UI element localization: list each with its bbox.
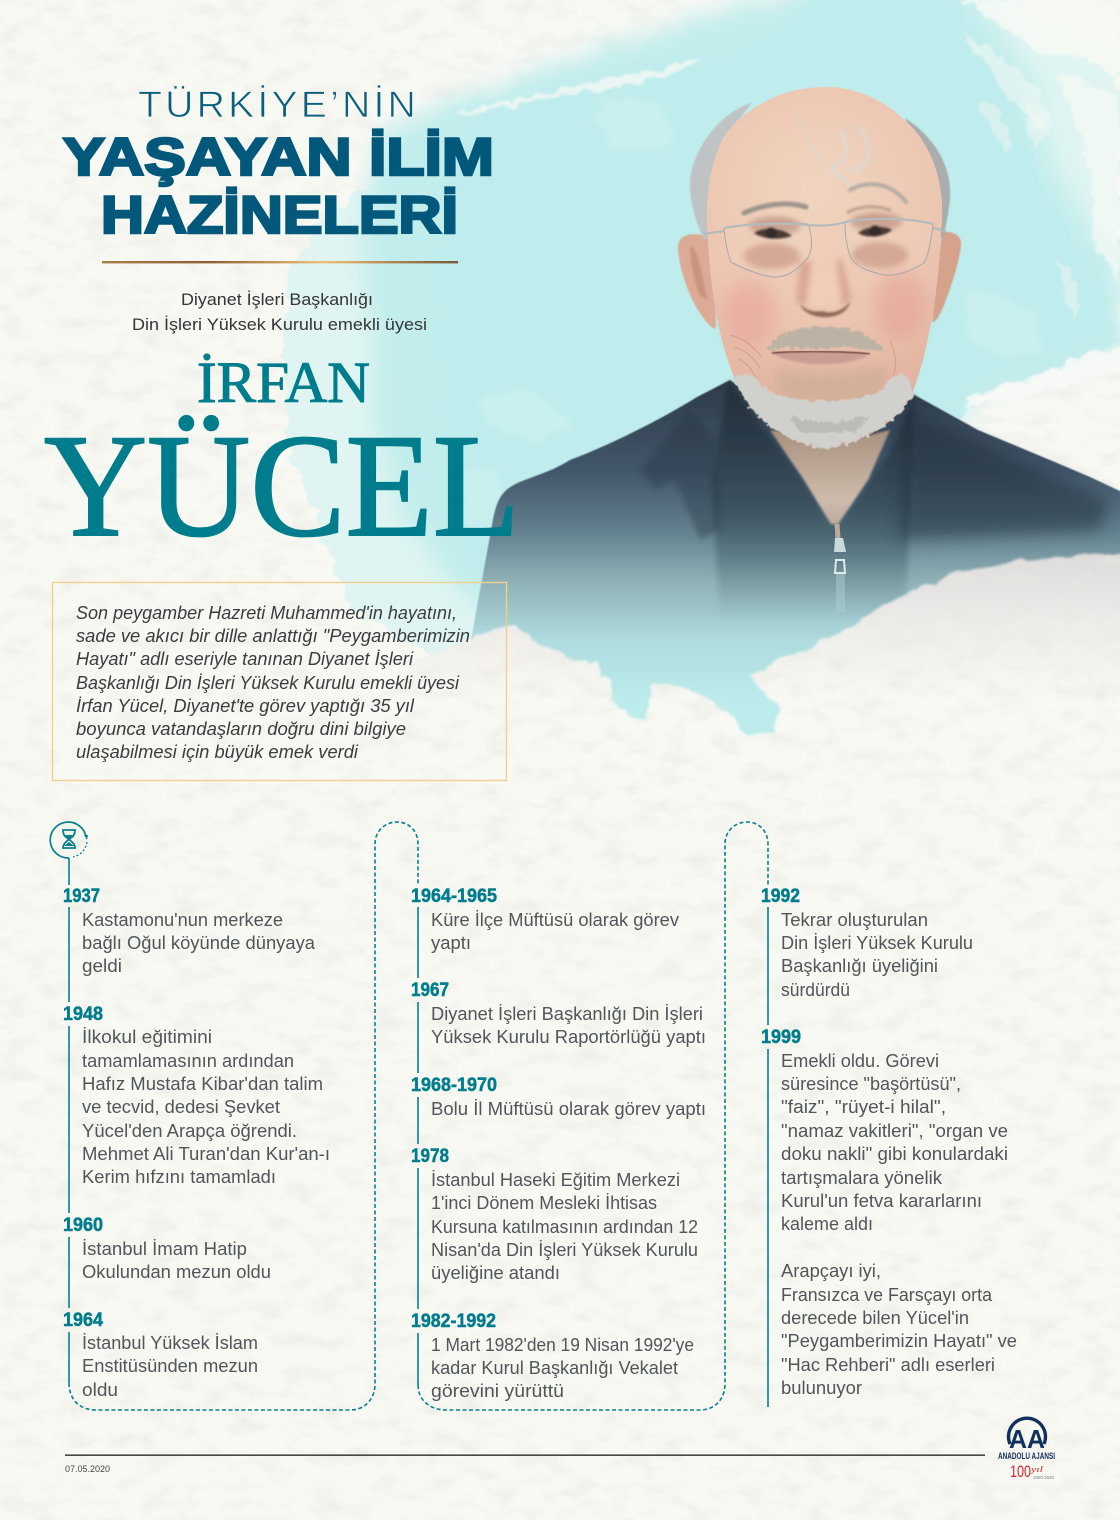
chin patch xyxy=(775,364,888,406)
timeline connector lines xyxy=(69,822,768,1410)
title: Hazineleri: HAZİNELERİ xyxy=(101,186,458,245)
gold divider xyxy=(102,261,458,263)
entry: 1967: Diyanet İşleri Başkanlığı Din İşleri xyxy=(431,1004,703,1024)
entry: 1948: Kerim hıfzını tamamladı xyxy=(82,1167,276,1187)
title: Türkiye'nin: TÜRKİYE’NİN xyxy=(138,84,419,125)
logo: Anadolu Ajansı: AA xyxy=(1009,1424,1045,1454)
subtitle: Din İşleri Yüksek Kurulu emekli üyesi xyxy=(132,315,427,334)
entry: 1999: süresince "başörtüsü", xyxy=(781,1074,961,1094)
entry: 1978: 1'inci Dönem Mesleki İhtisas xyxy=(431,1193,657,1213)
entry: 1982-1992: kadar Kurul Başkanlığı Vekalet xyxy=(431,1358,678,1378)
white brush streaks, upper edge and upper right xyxy=(450,0,1120,408)
title: Yaşayan İlim: YAŞAYAN İLİM xyxy=(63,128,494,187)
glasses xyxy=(704,219,946,277)
intro text box: İrfan Yücel, Diyanet'te görev yaptığı 35 yıl xyxy=(76,696,415,716)
entry: 1948 xyxy=(63,1004,330,1187)
entry: 1967 xyxy=(411,980,706,1047)
inner shirt and lapels xyxy=(712,382,915,620)
intro text box: Hayatı" adlı eseriyle tanınan Diyanet İşleri xyxy=(76,649,414,669)
eye sockets and bags xyxy=(744,243,800,269)
logo: Anadolu Ajansı xyxy=(998,1418,1055,1481)
entry: 1978: Kursuna katılmasının ardından 12 xyxy=(431,1217,698,1237)
entry: 1960: Okulundan mezun oldu xyxy=(82,1262,271,1282)
intro text box: Son peygamber Hazreti Muhammed'in hayatını, xyxy=(76,603,457,623)
subtitle xyxy=(132,290,427,334)
closing paragraph: derecede bilen Yücel'in xyxy=(781,1308,969,1328)
name: Yücel: YÜCEL xyxy=(44,404,520,567)
entry: 1992: Tekrar oluşturulan xyxy=(781,910,928,930)
entry: 1937: bağlı Oğul köyünde dünyaya xyxy=(82,933,316,953)
mouth xyxy=(772,351,870,364)
entry: 1964-1965: yaptı xyxy=(431,933,471,953)
right ear xyxy=(932,232,961,322)
closing paragraph: "Hac Rehberi" adlı eserleri xyxy=(781,1355,995,1375)
entry: 1964 xyxy=(63,1310,258,1400)
logo: Anadolu Ajansı: ANADOLU AJANSI xyxy=(998,1451,1055,1462)
entry: 1937: geldi xyxy=(82,956,122,976)
portrait of İrfan Yücel xyxy=(468,87,1120,740)
entry: 1964-1965 xyxy=(411,886,679,953)
logo: Anadolu Ajansı: 1920-2020 xyxy=(1033,1475,1054,1480)
entry: 1999 xyxy=(761,1027,1008,1234)
intro text box: boyunca vatandaşların doğru dini bilgiye xyxy=(76,719,406,739)
logo: Anadolu Ajansı: 100 xyxy=(1010,1462,1031,1481)
entry: 1964: oldu xyxy=(82,1380,118,1400)
moustache xyxy=(768,326,884,352)
entry: 1978: 1978 xyxy=(411,1146,449,1167)
entry: 1964: Enstitüsünden mezun xyxy=(82,1356,258,1376)
closing paragraph: bulunuyor xyxy=(781,1378,862,1398)
beard xyxy=(733,374,914,448)
entry: 1978: İstanbul Haseki Eğitim Merkezi xyxy=(431,1170,680,1190)
entry: 1948: İlkokul eğitimini xyxy=(82,1027,212,1047)
name: İrfan: İRFAN xyxy=(197,350,370,415)
timeline column 3 xyxy=(761,886,1017,1398)
closing paragraph: "Peygamberimizin Hayatı" ve xyxy=(781,1331,1017,1351)
entry: 1948: 1948 xyxy=(63,1004,103,1025)
entry: 1948: Hafız Mustafa Kibar'dan talim xyxy=(82,1074,323,1094)
closing paragraph: Fransızca ve Farsçayı orta xyxy=(781,1285,993,1305)
entry: 1982-1992: 1 Mart 1982'den 19 Nisan 1992'ye xyxy=(431,1335,694,1355)
entry: 1960: 1960 xyxy=(63,1215,103,1236)
eyes xyxy=(754,226,892,239)
entry: 1937 xyxy=(63,886,316,976)
entry: 1937: 1937 xyxy=(63,886,100,907)
entry: 1960: İstanbul İmam Hatip xyxy=(82,1239,247,1259)
intro text box: sade ve akıcı bir dille anlattığı "Peygamberimizin xyxy=(76,626,470,646)
neck xyxy=(770,430,890,524)
entry: 1964: 1964 xyxy=(63,1310,103,1331)
entry: 1999: Emekli oldu. Görevi xyxy=(781,1051,939,1071)
jacket xyxy=(468,380,1120,740)
timeline column 1 xyxy=(63,886,330,1400)
entry: 1999: kaleme aldı xyxy=(781,1214,873,1234)
entry: 1982-1992: görevini yürüttü xyxy=(431,1381,564,1401)
entry: 1937: Kastamonu'nun merkeze xyxy=(82,910,283,930)
entry: 1968-1970 xyxy=(411,1075,706,1119)
entry: 1992: 1992 xyxy=(761,886,800,907)
cheek wrinkles xyxy=(730,335,896,380)
left ear xyxy=(678,234,716,328)
entry: 1960 xyxy=(63,1215,271,1282)
lighter watercolor patches xyxy=(457,98,1041,532)
entry: 1999: "namaz vakitleri", "organ ve xyxy=(781,1121,1008,1141)
entry: 1992: sürdürdü xyxy=(781,980,850,1000)
closing paragraph: Arapçayı iyi, xyxy=(781,1261,881,1281)
entry: 1982-1992 xyxy=(411,1311,694,1401)
intro text box: ulaşabilmesi için büyük emek verdi xyxy=(76,742,359,762)
logo: Anadolu Ajansı: yıl xyxy=(1030,1465,1044,1474)
entry: 1968-1970: 1968-1970 xyxy=(411,1075,497,1096)
zipper xyxy=(834,524,846,612)
right shoulder shading xyxy=(900,410,1110,540)
eyebrows xyxy=(744,184,906,213)
entry: 1992 xyxy=(761,886,973,1000)
entry: 1992: Başkanlığı üyeliğini xyxy=(781,956,938,976)
head and face xyxy=(707,87,942,448)
intro text box xyxy=(52,582,506,780)
closing paragraph xyxy=(781,1261,1017,1398)
entry: 1999: "faiz", "rüyet-i hilal", xyxy=(781,1097,946,1117)
entry: 1999: Kurul'un fetva kararlarını xyxy=(781,1191,982,1211)
cheek blush xyxy=(724,280,776,344)
entry: 1948: Yücel'den Arapça öğrendi. xyxy=(82,1121,297,1141)
entry: 1948: ve tecvid, dedesi Şevket xyxy=(82,1097,280,1117)
forehead veins xyxy=(796,116,869,190)
entry: 1999: doku nakli" gibi konulardaki xyxy=(781,1144,1008,1164)
entry: 1978: üyeliğine atandı xyxy=(431,1263,560,1283)
entry: 1948: Mehmet Ali Turan'dan Kur'an-ı xyxy=(82,1144,330,1164)
nose xyxy=(802,225,846,306)
subtitle: Diyanet İşleri Başkanlığı xyxy=(181,290,373,309)
entry: 1968-1970: Bolu İl Müftüsü olarak görev yaptı xyxy=(431,1099,706,1119)
timeline column 2 xyxy=(411,886,706,1401)
entry: 1978 xyxy=(411,1146,698,1283)
grey hair left xyxy=(690,103,752,240)
entry: 1982-1992: 1982-1992 xyxy=(411,1311,496,1332)
footer rule xyxy=(65,1454,985,1456)
entry: 1967: 1967 xyxy=(411,980,449,1001)
date: 07.05.2020 xyxy=(65,1464,110,1475)
entry: 1964-1965: 1964-1965 xyxy=(411,886,497,907)
entry: 1992: Din İşleri Yüksek Kurulu xyxy=(781,933,973,953)
entry: 1964-1965: Küre İlçe Müftüsü olarak görev xyxy=(431,910,679,930)
grey hair right xyxy=(905,118,950,238)
watercolor blob behind portrait xyxy=(282,0,1120,700)
entry: 1999: 1999 xyxy=(761,1027,801,1048)
intro text box: Başkanlığı Din İşleri Yüksek Kurulu emekli üyesi xyxy=(76,673,460,693)
left lapel shading xyxy=(640,410,720,540)
entry: 1999: tartışmalara yönelik xyxy=(781,1168,943,1188)
entry: 1967: Yüksek Kurulu Raportörlüğü yaptı xyxy=(431,1027,706,1047)
icon: hourglass xyxy=(50,822,88,858)
lower white cloud covering the faded jacket xyxy=(430,552,1120,740)
entry: 1964: İstanbul Yüksek İslam xyxy=(82,1333,258,1353)
entry: 1948: tamamlamasının ardından xyxy=(82,1051,294,1071)
entry: 1978: Nisan'da Din İşleri Yüksek Kurulu xyxy=(431,1240,698,1260)
